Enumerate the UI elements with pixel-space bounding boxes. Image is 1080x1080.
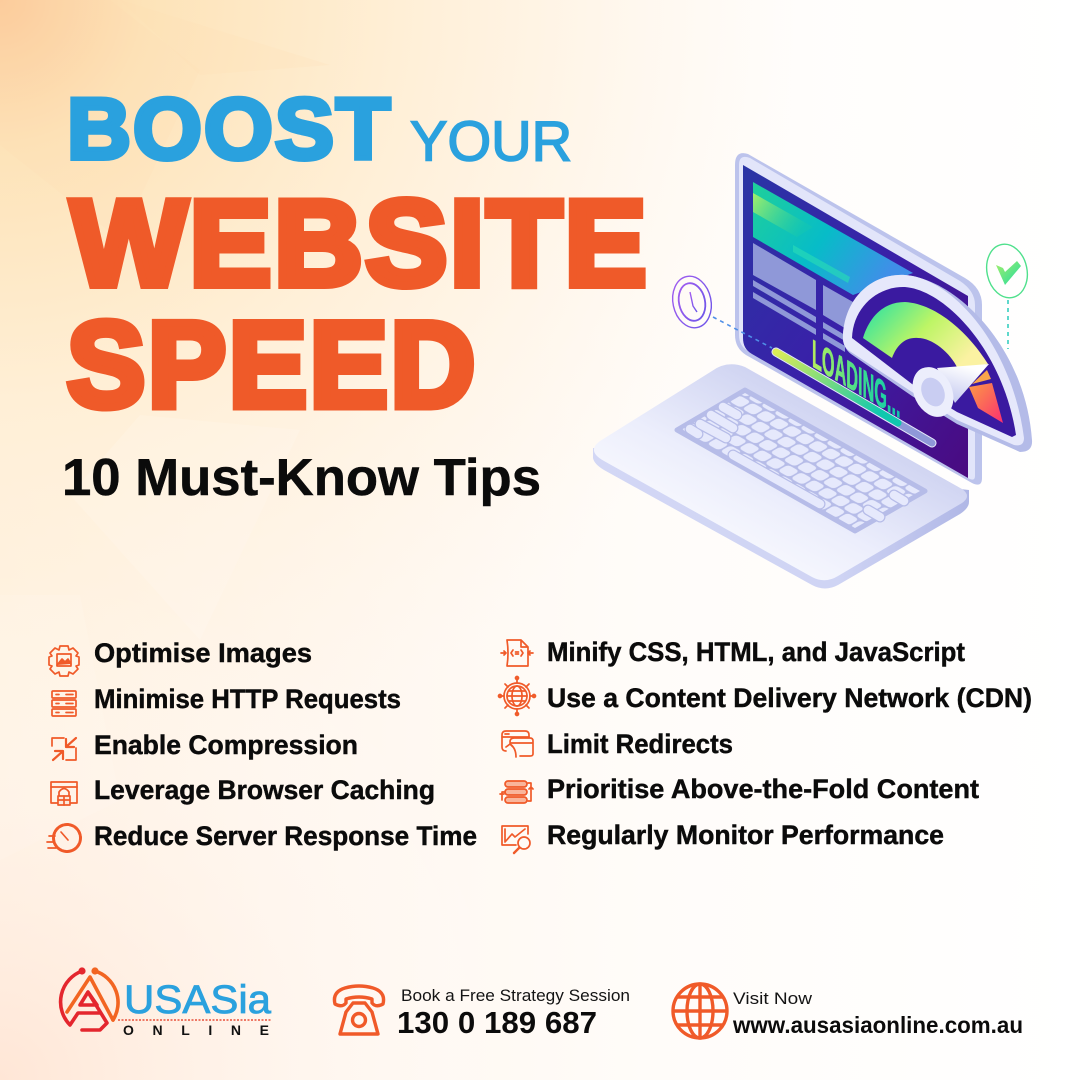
- progress bar: [776, 352, 932, 443]
- website url: www.ausasiaonline.com.au: [732, 1012, 1023, 1038]
- footer: [61, 969, 1023, 1040]
- logo rule: [118, 1019, 272, 1021]
- tip 1: Optimise Images: [94, 638, 312, 668]
- gauge needle: [905, 360, 989, 424]
- icon: check: [982, 240, 1032, 302]
- icon: timer: [47, 824, 80, 852]
- subtitle: 10 Must-Know Tips: [62, 449, 541, 507]
- logo tagline: ONLINE: [123, 1022, 269, 1038]
- tip 8: Limit Redirects: [547, 729, 733, 759]
- tips list: right column: [498, 637, 1032, 853]
- visit now label: Visit Now: [733, 989, 813, 1008]
- heading: boost: BOOST: [67, 82, 392, 177]
- icon: telephone: [334, 986, 384, 1034]
- tip 9: Prioritise Above-the-Fold Content: [547, 774, 979, 804]
- logo mark: [61, 969, 118, 1030]
- laptop screen: [735, 153, 982, 485]
- speed gauge: [843, 275, 1032, 452]
- icon: server: [52, 691, 76, 716]
- wide keys: [690, 407, 904, 517]
- laptop base: [593, 364, 969, 588]
- icon: gear image: [49, 646, 79, 676]
- loading label: LOADING...: [812, 332, 900, 427]
- gauge orange segment: [972, 370, 991, 384]
- keyboard: [677, 390, 925, 531]
- logo: [61, 969, 272, 1038]
- gauge red segment: [969, 383, 1003, 423]
- tip 6: Minify CSS, HTML, and JavaScript: [547, 637, 965, 667]
- title: [62, 82, 649, 507]
- icon: compress: [52, 738, 76, 760]
- tip 3: Enable Compression: [94, 730, 358, 760]
- icon: chart magnifier: [502, 826, 530, 853]
- strategy session label: Book a Free Strategy Session: [401, 986, 630, 1005]
- laptop illustration: [593, 153, 1032, 588]
- icon: code file: [501, 640, 533, 666]
- screen banner: [753, 182, 913, 295]
- icon: browser lock: [51, 782, 77, 805]
- tips list: left column: [47, 638, 477, 852]
- icon: stacked layers: [500, 781, 533, 803]
- screen placeholders: [753, 243, 853, 352]
- dashed connectors: [713, 300, 1008, 349]
- heading: your: YOUR: [410, 109, 572, 173]
- gauge arc: [863, 302, 988, 369]
- icon: clock: [668, 273, 716, 331]
- tip 7: Use a Content Delivery Network (CDN): [547, 683, 1032, 713]
- heading: speed: SPEED: [67, 297, 478, 433]
- icon: network globe: [498, 676, 536, 716]
- logo wordmark: USASia: [124, 978, 272, 1022]
- tip 10: Regularly Monitor Performance: [547, 820, 944, 850]
- tip 2: Minimise HTTP Requests: [94, 684, 401, 714]
- phone number: 130 0 189 687: [397, 1005, 597, 1040]
- tip 4: Leverage Browser Caching: [94, 775, 435, 805]
- icon: redirect windows: [502, 731, 533, 757]
- icon: globe: [673, 984, 727, 1038]
- tip 5: Reduce Server Response Time: [94, 821, 477, 851]
- heading: website: WEBSITE: [71, 174, 649, 311]
